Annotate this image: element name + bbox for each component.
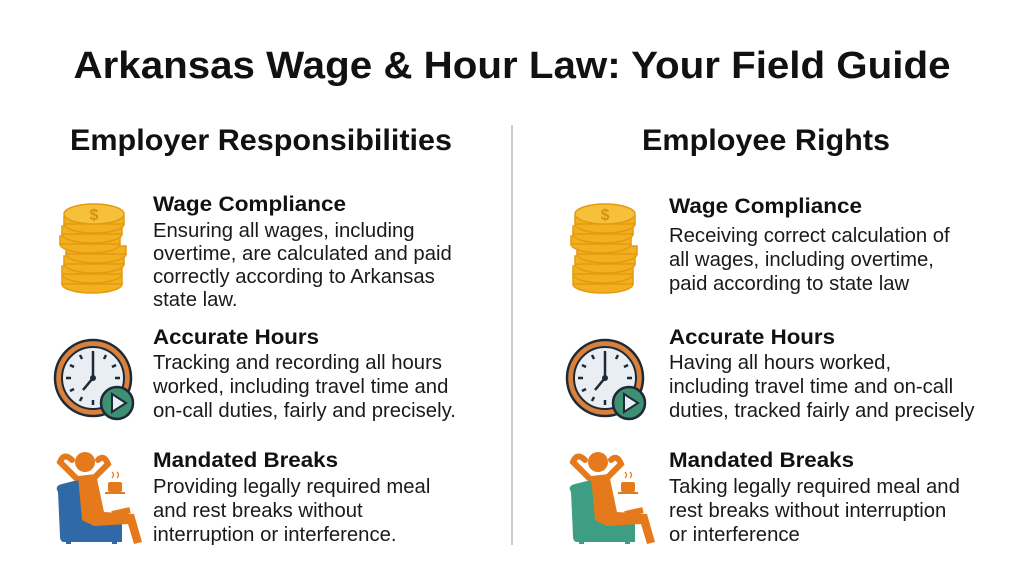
item: accurate hours: Accurate Hours — [153, 326, 319, 349]
item: wage compliance: Wage Compliance — [669, 195, 862, 218]
item: accurate hours: worked, including travel time and — [152, 376, 448, 398]
item: mandated breaks: interruption or interference. — [153, 524, 397, 546]
heading: employer: Employer Responsibilities — [70, 124, 452, 157]
heading: employee: Employee Rights — [642, 124, 890, 157]
item: mandated breaks — [153, 449, 430, 546]
icon: coins — [60, 204, 126, 293]
item: mandated breaks — [669, 449, 960, 546]
item: wage compliance: Receiving correct calculation of — [669, 225, 950, 247]
item: accurate hours — [669, 326, 975, 422]
item: accurate hours: duties, tracked fairly and precisely — [669, 400, 975, 422]
item: wage compliance: overtime, are calculated and paid — [153, 243, 452, 265]
item: wage compliance: state law. — [153, 289, 238, 311]
panel: employee rights — [567, 124, 975, 546]
item: wage compliance: paid according to state law — [669, 273, 909, 295]
title: Arkansas Wage & Hour Law: Your Field Guide — [74, 45, 950, 87]
item: mandated breaks: rest breaks without interruption — [669, 500, 946, 522]
icon: clock — [567, 340, 645, 419]
divider — [511, 125, 513, 545]
item: mandated breaks: or interference — [669, 524, 800, 546]
item: accurate hours — [152, 326, 456, 422]
item: accurate hours: Accurate Hours — [669, 326, 835, 349]
item: wage compliance: Ensuring all wages, including — [153, 220, 415, 242]
item: wage compliance: all wages, including overtime, — [669, 249, 934, 271]
panel: employer responsibilities — [55, 124, 456, 546]
icon: clock — [55, 340, 133, 419]
item: accurate hours: Tracking and recording all hours — [153, 352, 442, 374]
item: accurate hours: Having all hours worked, — [669, 352, 891, 374]
item: wage compliance: Wage Compliance — [153, 193, 346, 216]
item: mandated breaks: Taking legally required meal and — [669, 476, 960, 498]
icon: relaxing person — [570, 452, 655, 544]
icon: relaxing person — [57, 452, 142, 544]
item: wage compliance — [669, 195, 950, 295]
item: mandated breaks: and rest breaks without — [153, 500, 363, 522]
item: accurate hours: including travel time and on-call — [669, 376, 953, 398]
item: wage compliance: correctly according to Arkansas — [153, 266, 435, 288]
item: mandated breaks: Mandated Breaks — [669, 449, 854, 472]
icon: coins — [571, 204, 637, 293]
item: mandated breaks: Mandated Breaks — [153, 449, 338, 472]
item: accurate hours: on-call duties, fairly and precisely. — [153, 400, 456, 422]
item: mandated breaks: Providing legally required meal — [153, 476, 430, 498]
item: wage compliance — [153, 193, 452, 311]
